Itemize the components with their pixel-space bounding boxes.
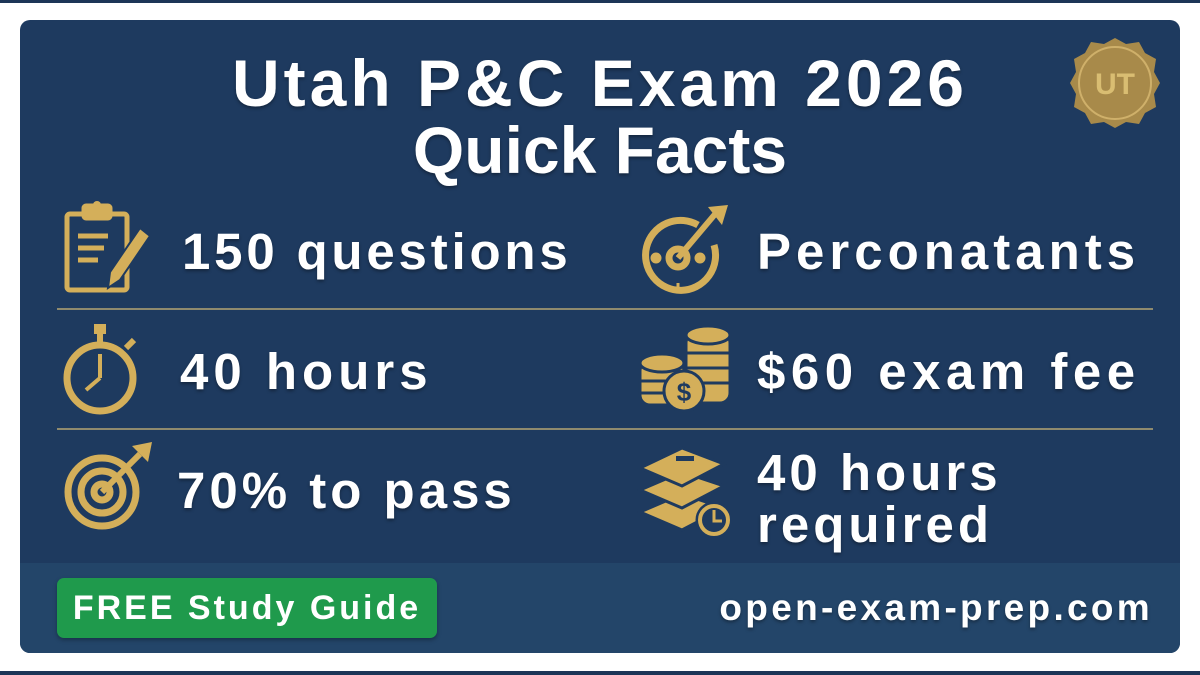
footer band <box>20 563 1180 653</box>
title: Utah P&C Exam 2026 <box>232 46 968 120</box>
button: FREE Study Guide: FREE Study Guide <box>73 589 421 627</box>
icon: UT badge: UT <box>1095 68 1135 101</box>
fact: 70% to pass: 70% to pass <box>177 462 516 519</box>
fact: 40 hours required: required <box>757 496 993 553</box>
title: Quick Facts <box>413 113 787 187</box>
fact: 40 hours: 40 hours <box>180 343 433 400</box>
title <box>232 46 968 189</box>
icon: UT badge <box>1070 38 1160 128</box>
icon: clipboard <box>64 201 149 292</box>
button: FREE Study Guide <box>57 578 437 638</box>
fact: 150 questions: 150 questions <box>182 223 572 280</box>
fact: 40 hours required <box>756 444 1002 556</box>
icon: books with clock <box>644 450 730 536</box>
icon: coins: $ <box>677 377 692 407</box>
fact: 40 hours required: 40 hours <box>757 444 1002 501</box>
icon: target clock <box>642 205 728 294</box>
icon: coins <box>642 328 728 410</box>
fact: Perconatants: Perconatants <box>757 223 1140 280</box>
url: open-exam-prep.com <box>719 587 1153 628</box>
icon: target <box>64 442 152 530</box>
icon: stopwatch <box>64 324 136 414</box>
fact: $60 exam fee: $60 exam fee <box>757 343 1141 400</box>
